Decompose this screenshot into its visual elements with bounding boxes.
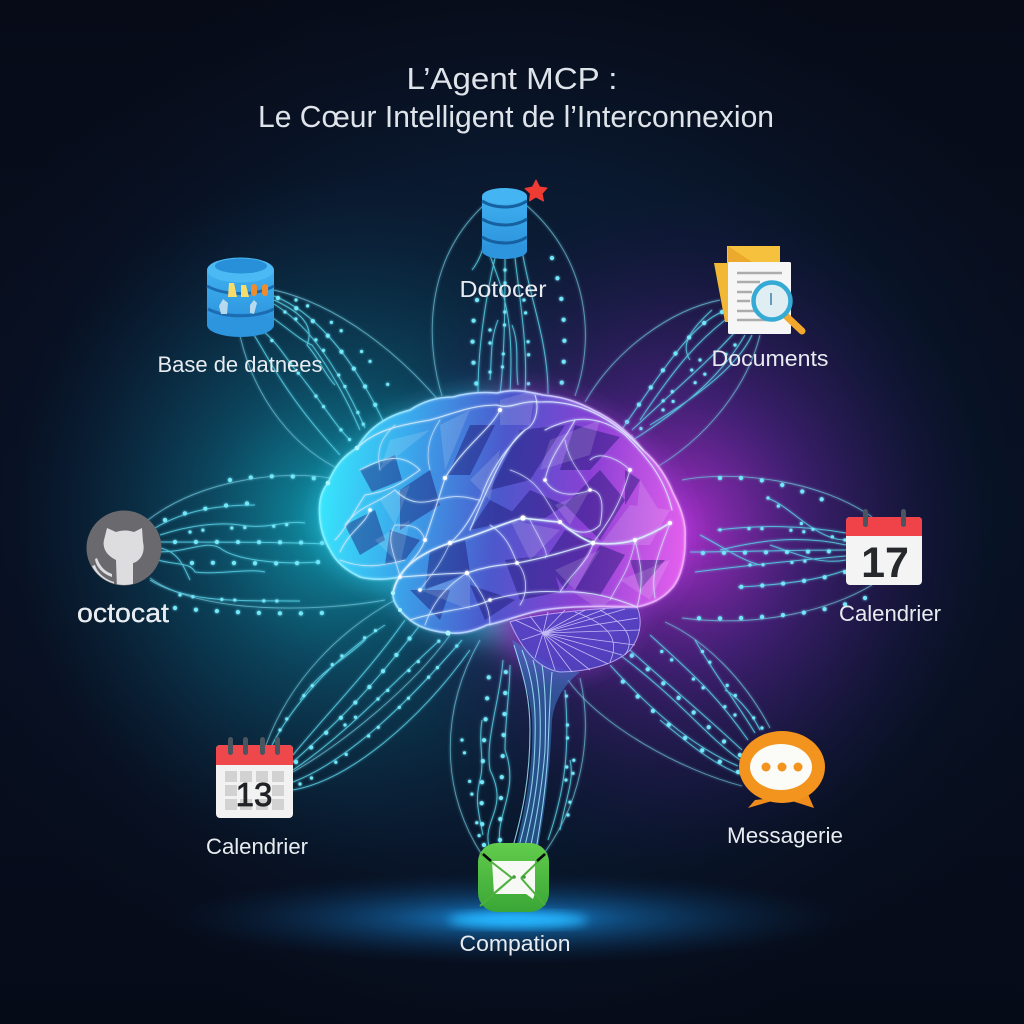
cerebrum [320,391,684,632]
connections: messaging [568,622,770,786]
title: L’Agent MCP : [406,61,618,96]
label: messagerie: Messagerie [727,823,843,848]
label: calendrier right: Calendrier [839,601,941,626]
label: dotocer: Dotocer [460,276,547,302]
dark facets [345,425,665,620]
icon: message bubble [739,731,825,808]
cerebellum [510,607,640,672]
node sparkles [368,408,672,602]
label: octocat: octocat [77,598,170,628]
label: base de données: Base de datnees [158,352,322,377]
label: documents: Documents [712,346,828,371]
title [258,61,774,134]
icon: octocat [86,510,162,592]
brain stem [512,640,580,850]
brain [310,380,700,850]
label: calendrier left: Calendrier [206,834,308,859]
connections: left calendar [266,600,470,790]
icon: database left [207,258,274,337]
label: compation: Compation [460,931,570,956]
title: Le Cœur Intelligent de l’Interconnexion [258,99,774,134]
connections: database left [240,290,440,472]
connections: documents [585,300,760,476]
connections: right calendar [682,476,872,621]
brain edge nodes [326,446,451,636]
icon: calendar 17: 17 [861,539,909,587]
connections: bottom app [450,640,585,855]
light facets [375,390,670,610]
icon: calendar 13: 13 [236,776,272,813]
brain glow [320,392,685,673]
brain outline [319,391,685,633]
icon: star [525,180,547,201]
icon: calendar 13 [216,737,293,818]
brain wiring [319,391,685,633]
icon: database top [482,180,547,259]
icon: documents [714,246,802,334]
major folds [393,518,670,593]
connections: octocat [148,475,385,613]
connections: top database [432,205,585,396]
icon: calendar 17 [846,509,922,587]
icon: green mail app [478,843,549,912]
